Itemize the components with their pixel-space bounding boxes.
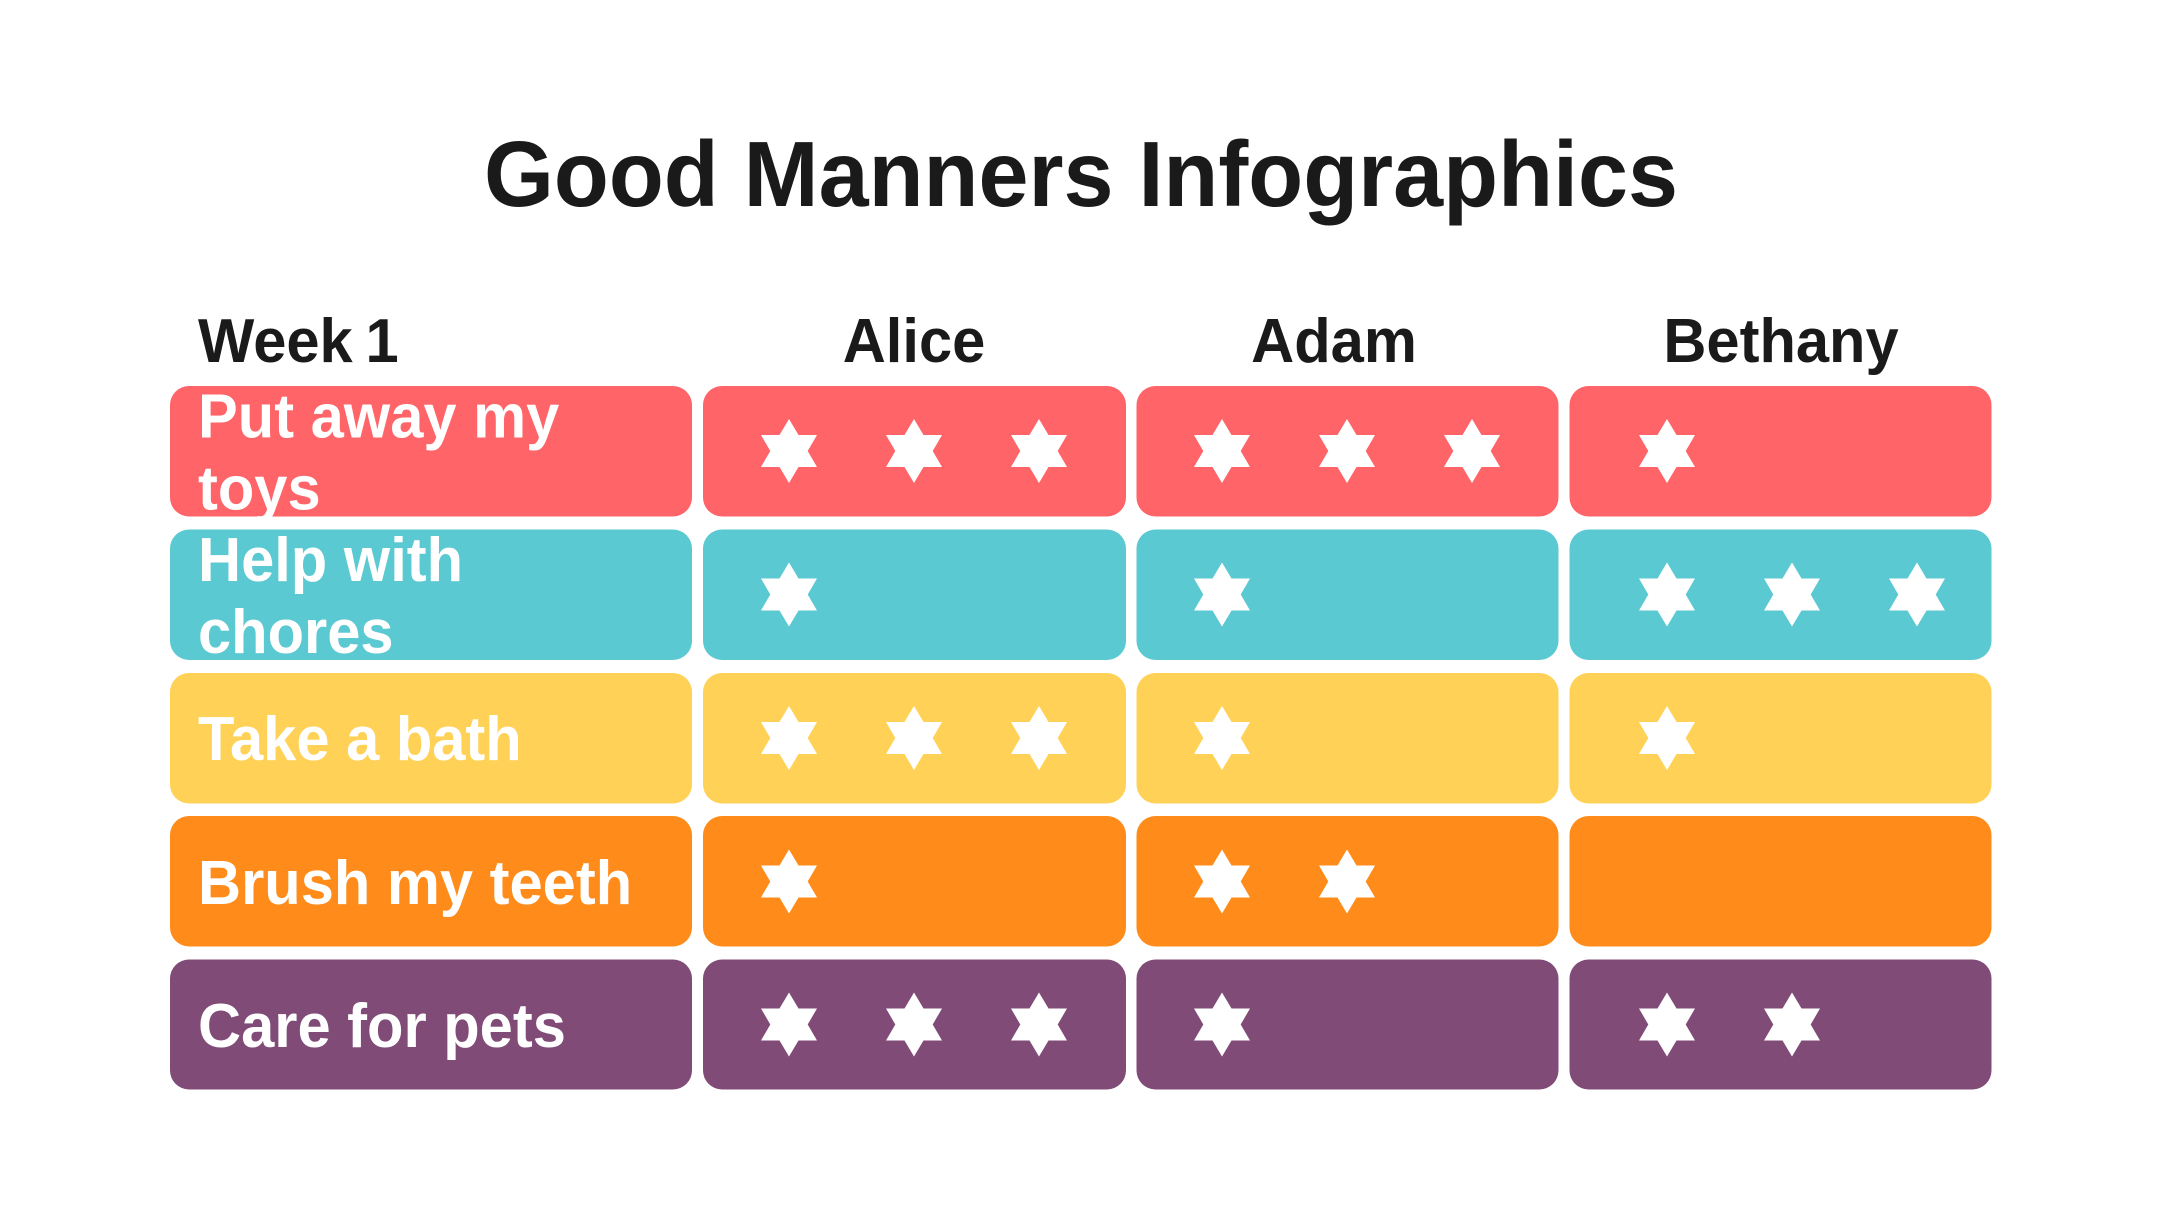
- label: Put away my toys: Put away my: [198, 381, 559, 451]
- Bethany: no stars: [1570, 816, 1992, 946]
- label: Help with chores: [170, 525, 692, 666]
- header: Adam: Adam: [1251, 306, 1417, 375]
- Alice: 3 stars: [703, 673, 1126, 804]
- Adam: 1 star: [1136, 960, 1558, 1090]
- header: Alice: Alice: [843, 306, 985, 375]
- Alice: 1 star: [703, 816, 1126, 946]
- title: Good Manners Infographics: [484, 123, 1678, 226]
- Alice: 3 stars: [703, 960, 1126, 1090]
- Alice: 3 stars: [703, 386, 1126, 516]
- Adam: 3 stars: [1136, 386, 1558, 516]
- Adam: 1 star: [1136, 530, 1558, 660]
- Adam: 1 star: [1136, 673, 1558, 804]
- label: Care for pets: Care for pets: [198, 991, 566, 1060]
- label: Put away my toys: toys: [198, 453, 321, 523]
- header: Week 1: Week 1: [198, 306, 399, 375]
- label: Help with chores: chores: [198, 597, 394, 666]
- Bethany: 2 stars: [1570, 960, 1992, 1090]
- row: Brush my teeth: [170, 816, 1992, 946]
- label: Take a bath: [170, 673, 692, 804]
- row: Put away my toys: [170, 381, 1992, 523]
- row: Help with chores: [170, 525, 1992, 666]
- Bethany: 1 star: [1570, 673, 1992, 804]
- column headers: [198, 306, 1899, 375]
- label: Brush my teeth: [170, 816, 692, 946]
- label: Care for pets: [170, 960, 692, 1090]
- Bethany: 1 star: [1570, 386, 1992, 516]
- Bethany: 3 stars: [1570, 530, 1992, 660]
- Alice: 1 star: [703, 530, 1126, 660]
- label: Brush my teeth: Brush my teeth: [198, 848, 632, 917]
- row: Care for pets: [170, 960, 1992, 1090]
- label: Help with chores: Help with: [198, 525, 463, 594]
- row: Take a bath: [170, 673, 1992, 804]
- label: Take a bath: Take a bath: [198, 704, 522, 773]
- Adam: 2 stars: [1136, 816, 1558, 946]
- header: Bethany: Bethany: [1663, 306, 1899, 375]
- label: Put away my toys: [170, 381, 692, 523]
